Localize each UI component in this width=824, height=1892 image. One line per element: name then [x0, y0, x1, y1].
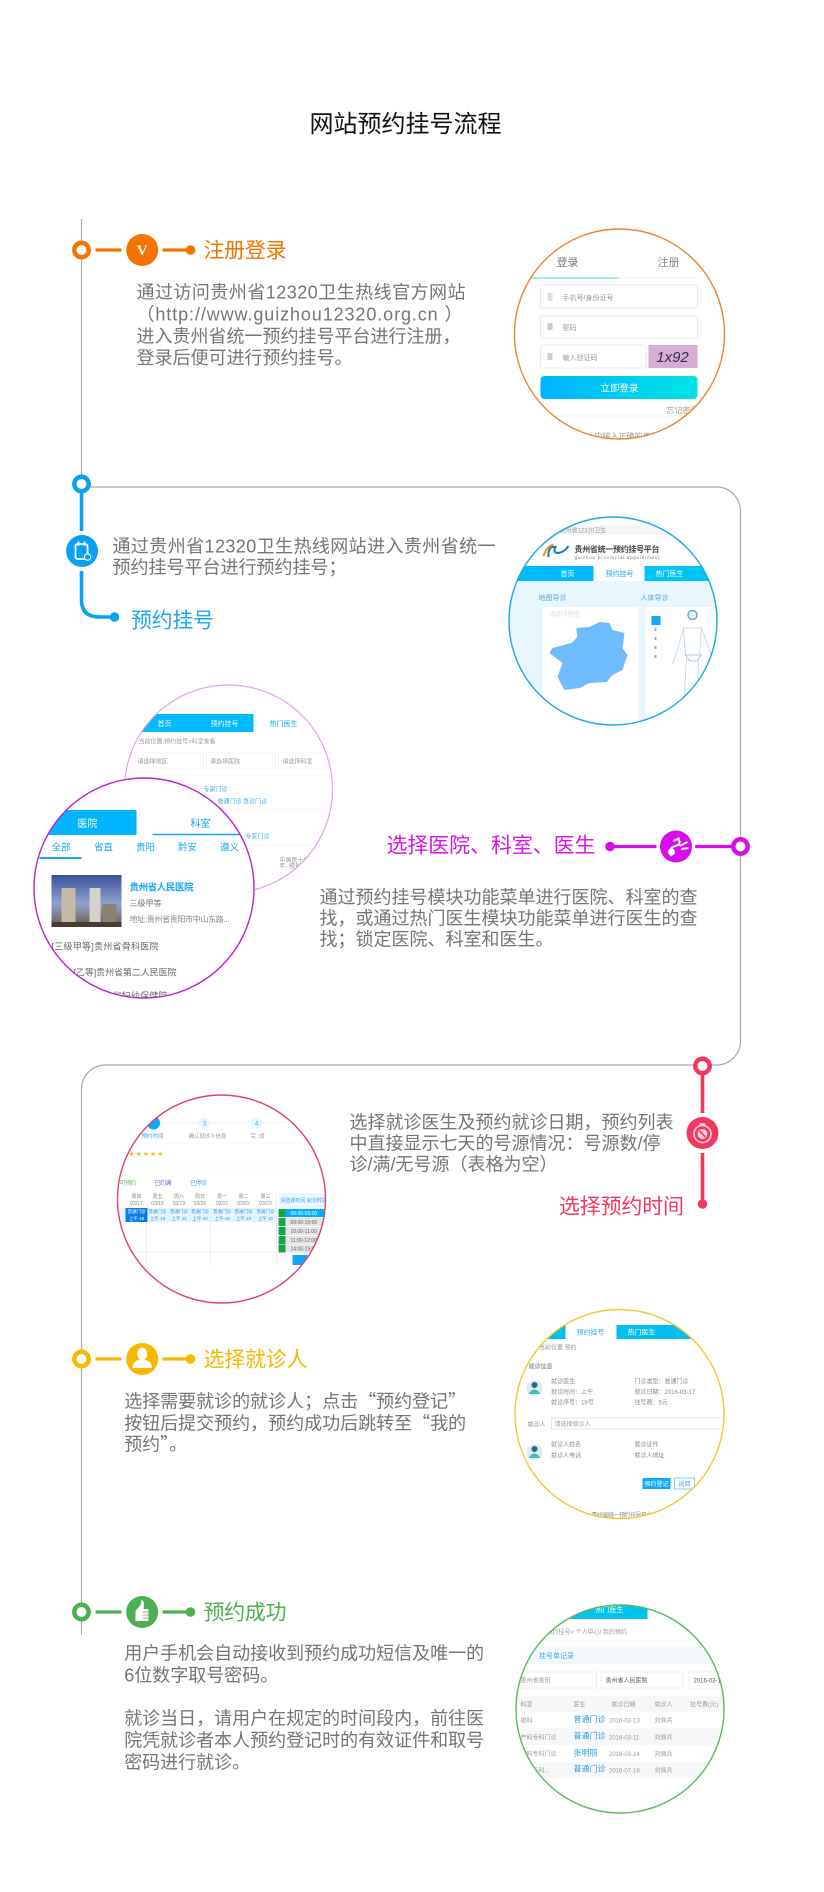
patient screenshot circle: 就诊人电话	[551, 1452, 581, 1460]
patient screenshot circle: 热门医生	[628, 1328, 656, 1336]
login screenshot circle: 登录	[556, 255, 578, 269]
my appointments screenshot circle: 普通门诊	[574, 1730, 606, 1740]
dark circle screenshot: hospital list: 黔安	[178, 842, 197, 854]
schedule screenshot circle: ★★★★★	[128, 1151, 165, 1158]
patient screenshot circle: 就诊信息	[528, 1362, 553, 1370]
schedule screenshot circle: 请选择时间 就诊时段	[280, 1197, 327, 1204]
schedule screenshot circle: 03/22	[237, 1201, 250, 1207]
schedule screenshot circle: 11:00-12:00	[290, 1238, 317, 1244]
schedule screenshot circle: 03/18	[151, 1201, 164, 1207]
step 5: choose patient	[74, 1310, 732, 1519]
step 5 description: 按钮后提交预约，预约成功后跳转至“我的	[124, 1410, 466, 1436]
step 4 connector and badge	[686, 1059, 718, 1209]
schedule screenshot circle: 周一	[217, 1194, 227, 1200]
portal screenshot circle: 请选择地区	[550, 610, 580, 618]
schedule screenshot circle: 上午 19	[129, 1215, 145, 1222]
schedule screenshot circle: 普通门诊	[191, 1208, 209, 1215]
light circle screenshot: doctor search: 首页	[158, 719, 172, 728]
step 4 description: 诊/满/无号源（表格为空）	[350, 1154, 558, 1174]
step 2 description: 通过贵州省12320卫生热线网站进入贵州省统一	[112, 536, 496, 556]
schedule screenshot circle: 普通门诊	[234, 1208, 253, 1215]
step 1 description	[136, 282, 466, 368]
my appointments screenshot circle: 刘佩兵	[654, 1766, 673, 1774]
schedule screenshot circle: 普通门诊	[128, 1208, 146, 1215]
icon: thumbs up	[136, 1600, 150, 1621]
step 2 heading: 预约挂号	[131, 610, 214, 632]
schedule screenshot circle: 上午 10	[192, 1215, 208, 1222]
portal screenshot circle: guizhou provincial appointment	[574, 555, 660, 560]
schedule screenshot circle: 可预约	[120, 1179, 136, 1187]
portal screenshot circle: 地图导诊	[538, 593, 566, 602]
my appointments screenshot circle: 就诊人	[654, 1700, 673, 1708]
light circle screenshot: doctor search: 请选择医院	[210, 758, 240, 766]
avatars	[526, 1380, 542, 1460]
step 6: appointment success	[74, 1596, 729, 1813]
light circle screenshot: doctor search: 当前位置:预约挂号>科室查看	[138, 738, 216, 746]
infographic canvas	[33, 112, 750, 1814]
portal screenshot circle	[508, 517, 720, 727]
my appointments screenshot circle: 2016-03-13	[609, 1718, 640, 1724]
login screenshot circle: 注册	[658, 255, 680, 269]
my appointments screenshot circle: 刘佩兵	[654, 1716, 673, 1724]
patient screenshot circle: 请选择就诊人	[554, 1420, 591, 1428]
schedule screenshot circle: 上午 19	[150, 1215, 166, 1222]
dark circle screenshot: hospital list: 遵义	[220, 842, 239, 854]
patient screenshot circle: 就诊证件	[634, 1440, 659, 1448]
step 5 description: 选择需要就诊的就诊人；点击“预约登记”	[124, 1388, 466, 1414]
schedule screenshot circle: 08:00-09:00	[290, 1211, 317, 1217]
patient screenshot circle: 就诊时间：上午	[551, 1388, 593, 1396]
step 3 description: 找，或通过热门医生模块功能菜单进行医生的查	[320, 908, 698, 928]
portal screenshot circle: 贵州省统一预约挂号平台	[574, 544, 660, 554]
dark circle screenshot: hospital list: 省直	[94, 842, 113, 854]
schedule screenshot circle: 上午 20	[258, 1215, 274, 1222]
schedule screenshot circle: 预约时间	[142, 1132, 164, 1140]
schedule screenshot circle: 03/20	[194, 1201, 206, 1207]
step 3 heading: 选择医院、科室、医生	[386, 834, 596, 858]
step 1 description: 进入贵州省统一预约挂号平台进行注册，	[136, 326, 460, 346]
step 2: make appointment	[66, 477, 721, 727]
step 6 connector and badge	[74, 1596, 195, 1628]
light circle screenshot: doctor search: 中国医十年经验	[280, 856, 322, 864]
dark circle screenshot: hospital list: [三级甲等]贵州省骨科医院	[52, 940, 158, 952]
schedule screenshot circle: 普通门诊	[148, 1208, 167, 1215]
step 3 description: 找；锁定医院、科室和医生。	[320, 930, 554, 950]
patient screenshot circle: 当前位置:预约	[539, 1344, 577, 1352]
map of Guizhou	[550, 622, 628, 690]
schedule screenshot circle: 上午 11	[172, 1215, 187, 1222]
step 1 heading: 注册登录	[204, 240, 286, 262]
step 2 description: 预约挂号平台进行预约挂号；	[112, 558, 346, 578]
my appointments screenshot circle: 刘佩兵	[654, 1734, 673, 1742]
dark circle screenshot: hospital list: 省妇幼保健院	[112, 990, 168, 1001]
my appointments screenshot circle: 热门医生	[596, 1605, 624, 1614]
step 6 description: 用户手机会自动接收到预约成功短信及唯一的	[124, 1644, 484, 1664]
light circle screenshot: doctor search: 年, 擅长	[280, 862, 301, 870]
my appointments screenshot circle: 2016-03-14	[609, 1752, 640, 1758]
human figure	[672, 610, 714, 695]
schedule screenshot circle: 上午 19	[236, 1215, 252, 1222]
login screenshot circle: 手机号/身份证号	[562, 293, 613, 302]
step 1 description: 通过访问贵州省12320卫生热线官方网站	[136, 282, 466, 302]
my appointments screenshot circle: 医生	[574, 1700, 586, 1708]
dark circle screenshot: hospital list: 贵阳	[136, 842, 155, 854]
schedule screenshot circle: 普通门诊	[213, 1208, 232, 1215]
schedule screenshot circle: 已停诊	[190, 1179, 207, 1187]
portal screenshot circle: 人体导诊	[640, 593, 668, 602]
patient screenshot circle: 返回	[678, 1481, 691, 1488]
dark circle screenshot: hospital list	[30, 778, 254, 1001]
hospital photo	[52, 875, 122, 927]
step 3 connector and badge	[605, 830, 748, 862]
patient screenshot circle: 就诊人	[528, 1420, 546, 1428]
portal screenshot circle: 预约挂号	[606, 569, 634, 578]
my appointments screenshot circle: 就诊日期	[612, 1700, 636, 1708]
step 3 description: 通过预约挂号模块功能菜单进行医院、科室的查	[320, 888, 698, 908]
icon: DNA	[669, 838, 688, 856]
schedule screenshot circle: 03/21	[216, 1201, 229, 1207]
step 2 description	[112, 536, 496, 578]
patient screenshot circle: 预约挂号	[576, 1328, 604, 1336]
step 1: register and log in	[74, 229, 725, 441]
schedule screenshot circle: 普通门诊	[256, 1208, 275, 1215]
patient screenshot circle: 就诊日期：2016-03-17	[634, 1388, 696, 1396]
light circle screenshot: doctor search: 普通门诊 急诊门诊	[218, 798, 267, 806]
dark circle screenshot: hospital list: 三级甲等	[130, 898, 162, 908]
step 5 description: 预约”。	[124, 1430, 187, 1456]
step 4 description	[350, 1112, 674, 1174]
login screenshot circle: 密码	[562, 323, 576, 332]
step 1 connector and badge: V	[137, 243, 148, 259]
dark circle screenshot: hospital list: 地址:贵州省贵阳市中山东路...	[130, 914, 230, 924]
step 4 heading: 选择预约时间	[559, 1196, 684, 1218]
step 3: choose hospital, department, doctor	[30, 685, 748, 1001]
my appointments screenshot circle: 科室	[520, 1700, 533, 1708]
step 4: choose time	[118, 1059, 718, 1303]
light circle screenshot: doctor search: 热门医生	[270, 719, 298, 728]
my appointments screenshot circle: 预约挂号> 个人中心/ 我的预约	[546, 1628, 627, 1636]
dark circle screenshot: hospital list: [乙等]贵州省第二人民医院	[74, 966, 176, 978]
my appointments screenshot circle: 妇科专科门诊	[520, 1750, 557, 1758]
schedule screenshot circle: 普通门诊	[170, 1208, 188, 1215]
my appointments screenshot circle: 刘佩兵	[654, 1750, 673, 1758]
portal screenshot circle: 热门医生	[656, 569, 684, 578]
login screenshot circle: 输入验证码	[562, 353, 598, 362]
schedule screenshot circle: 10:00-11:00	[290, 1229, 317, 1235]
schedule screenshot circle	[118, 1095, 328, 1303]
login screenshot circle: 立即登录	[600, 382, 639, 394]
step 6 description	[124, 1644, 484, 1772]
portal logo	[544, 545, 568, 557]
title: 网站预约挂号流程	[310, 111, 502, 138]
login screenshot circle: 1x92	[656, 349, 689, 366]
my appointments screenshot circle: 眼科	[520, 1716, 533, 1724]
patient screenshot circle: 就诊人姓名	[551, 1440, 581, 1448]
icon: calendar	[76, 542, 91, 560]
step 1 connector and badge	[74, 234, 195, 266]
step 5 heading: 选择就诊人	[204, 1348, 308, 1372]
step 6 description: 院凭就诊者本人预约登记时的有效证件和取号	[124, 1730, 484, 1750]
step 4 description: 中直接显示七天的号源情况：号源数/停	[350, 1134, 660, 1154]
dark circle screenshot: hospital list: 医院	[78, 817, 98, 830]
patient screenshot circle: 就诊医生	[551, 1378, 575, 1386]
portal screenshot circle: 贵州省12320卫生	[560, 526, 606, 534]
my appointments screenshot circle: 2016-07-18	[609, 1768, 640, 1774]
schedule screenshot circle: 周日	[195, 1194, 205, 1200]
schedule screenshot circle: 14:00-15:00	[290, 1246, 317, 1252]
schedule screenshot circle: 周六	[174, 1193, 184, 1200]
login screenshot circle	[514, 229, 724, 441]
schedule screenshot circle: 已约满	[154, 1179, 172, 1187]
patient screenshot circle	[515, 1310, 732, 1519]
schedule screenshot circle: 03/23	[259, 1201, 272, 1207]
gray flow line	[82, 219, 740, 1635]
light circle screenshot: doctor search: 专家门诊	[204, 786, 228, 794]
dark circle screenshot: hospital list: 全部	[51, 842, 71, 854]
patient screenshot circle: 贵州省统一预约挂号平台	[592, 1511, 652, 1519]
step 6 description: 就诊当日，请用户在规定的时间段内，前往医	[124, 1708, 484, 1728]
patient screenshot circle: 预约登记	[644, 1480, 669, 1488]
my appointments screenshot circle: 肾内专科...	[520, 1766, 550, 1774]
my appointments screenshot circle: 贵州省人民医院	[606, 1676, 648, 1684]
login screenshot circle: 忘记密码	[666, 405, 698, 415]
schedule screenshot circle: 4	[255, 1122, 259, 1128]
login screenshot circle: 中输入正确的身份	[594, 431, 658, 441]
patient screenshot circle: 就诊人地址	[634, 1452, 665, 1460]
my appointments screenshot circle: 产科专科门诊	[520, 1734, 557, 1742]
my appointments screenshot circle: 张明丽	[574, 1748, 598, 1758]
dark circle screenshot: hospital list: 贵州省人民医院	[130, 882, 194, 894]
schedule screenshot circle: 周五	[152, 1194, 163, 1200]
my appointments screenshot circle: 挂号费(元)	[690, 1700, 718, 1708]
portal screenshot circle: 首页	[560, 569, 574, 578]
light circle screenshot: doctor search	[124, 685, 332, 893]
step 5 connector and badge	[74, 1343, 195, 1375]
icon: person	[132, 1348, 152, 1368]
schedule screenshot circle: 周三	[260, 1194, 271, 1200]
light circle screenshot: doctor search: 请选择科室	[282, 758, 313, 766]
my appointments screenshot circle: 2016-03-1	[694, 1678, 722, 1684]
step 1 description: （http://www.guizhou12320.org.cn ）	[136, 304, 462, 324]
schedule screenshot circle: 完成	[250, 1132, 265, 1140]
light circle screenshot: doctor search: 预约挂号	[210, 719, 238, 728]
step 2 connector and badge	[66, 477, 119, 622]
schedule screenshot circle: 3	[203, 1122, 207, 1128]
my appointments screenshot circle: 贵州省贵阳	[520, 1676, 551, 1684]
patient screenshot circle: 挂号费：5元	[634, 1398, 668, 1406]
step 6 description: 6位数字取号密码。	[124, 1666, 278, 1686]
schedule screenshot circle: 03/17	[130, 1201, 143, 1207]
schedule screenshot circle: 09:00-10:00	[290, 1220, 317, 1226]
step 6 heading: 预约成功	[204, 1602, 286, 1624]
my appointments screenshot circle	[516, 1605, 729, 1813]
step 3 description	[320, 888, 698, 950]
step 1 description: 登录后便可进行预约挂号。	[136, 348, 352, 368]
my appointments screenshot circle: 2016-03-11	[609, 1736, 640, 1742]
light circle screenshot: doctor search: 专家门诊	[246, 832, 270, 840]
patient screenshot circle: 门诊类型：普通门诊	[634, 1378, 689, 1386]
step 5 description	[124, 1388, 466, 1456]
schedule screenshot circle: 周四	[131, 1194, 142, 1200]
schedule screenshot circle: 确认就诊人信息	[188, 1132, 227, 1140]
schedule screenshot circle: 周二	[238, 1194, 249, 1200]
dark circle screenshot: hospital list: 科室	[190, 817, 210, 830]
my appointments screenshot circle: 挂号单记录	[539, 1651, 574, 1660]
step 6 description: 密码进行就诊。	[124, 1752, 250, 1772]
my appointments screenshot circle: 普通门诊	[574, 1764, 606, 1774]
patient screenshot circle: 就诊序号：19号	[551, 1398, 594, 1406]
icon: compass watch	[694, 1124, 711, 1142]
light circle screenshot: doctor search: 请选择地区	[138, 758, 168, 766]
schedule screenshot circle: 03/19	[173, 1201, 185, 1207]
schedule screenshot circle: 上午 18	[214, 1215, 230, 1222]
step 4 description: 选择就诊医生及预约就诊日期，预约列表	[350, 1112, 674, 1132]
my appointments screenshot circle: 普通门诊	[574, 1714, 606, 1724]
